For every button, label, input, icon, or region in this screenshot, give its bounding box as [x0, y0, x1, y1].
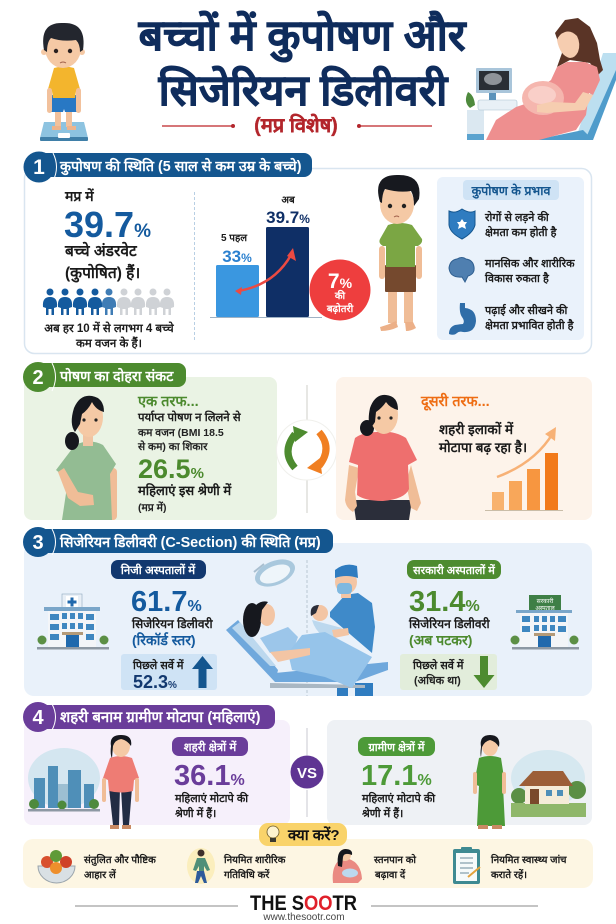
effect: immunity: [449, 209, 558, 239]
label: private hospitals: [111, 560, 206, 579]
arrow: rising trend: [235, 248, 296, 295]
illustration: rural woman: [473, 735, 506, 829]
label: government hospitals: [407, 560, 501, 579]
statistic: 39.7 percent underweight: मप्र में: [64, 188, 95, 204]
statistic: 17.1 percent: श्रेणी में हैं।: [361, 806, 403, 820]
section 3 heading: 3: [32, 532, 44, 554]
panel: section 4 left, urban: [24, 720, 290, 829]
badge: 7 percent increase: बढ़ोतरी: [326, 302, 354, 315]
statistic: 17.1 percent: 17.1%: [361, 760, 432, 792]
label: urban areas: [172, 737, 248, 756]
statistic: 39.7 percent underweight: 39.7%: [64, 204, 151, 245]
effect: immunity: क्षेमता कम होती है: [485, 225, 558, 239]
statistic: 17.1 percent: महिलाएं मोटापे की: [361, 791, 436, 805]
illustration: surgical lamp: [251, 554, 299, 592]
badge: VS: VS: [297, 765, 317, 782]
text: first side: महिलाएं इस श्रेणी में: [137, 483, 232, 498]
logo: The Sootr: THE SOOTR: [250, 892, 357, 915]
statistic: 31.4 percent: सिजेरियन डिलीवरी: [408, 617, 490, 631]
section 4 heading: [23, 702, 275, 732]
effect: learning: क्षेमता प्रभावित होती है: [485, 318, 575, 332]
section 3 heading: सिजेरियन डिलीवरी (C-Section) की स्थिति (मप्र): [59, 533, 321, 551]
bar chart: rising obesity: [485, 427, 563, 510]
pictogram: 4 of 10 children: [43, 288, 174, 315]
heading: what should be done: क्या करें?: [287, 826, 340, 844]
section 4 heading: शहरी बनाम ग्रामीण मोटापा (महिलाएं): [60, 708, 261, 726]
illustration: urban woman: [102, 735, 139, 829]
callout: previous survey higher: पिछले सर्वे में: [412, 658, 465, 672]
statistic: 39.7 percent underweight: (कुपोषित) हैं।: [65, 263, 140, 283]
panel: section 2 left, undernutrition: [24, 377, 277, 520]
statistic: 31.4 percent: 31.4%: [409, 586, 480, 618]
item: physical activity: [187, 848, 287, 884]
section 2 heading: 2: [32, 367, 44, 389]
statistic: 31.4 percent: [408, 586, 490, 648]
pictogram caption: अब हर 10 में से लगभग 4 बच्चे: [44, 321, 174, 335]
statistic: 36.1 percent: श्रेणी में हैं।: [174, 806, 216, 820]
statistic: 36.1 percent: 36.1%: [174, 760, 245, 792]
text: second side: शहरी इलाकों में: [439, 421, 514, 437]
item: breastfeeding: [333, 849, 416, 883]
text: first side: [137, 394, 242, 514]
section 1 heading: 1: [33, 156, 45, 179]
text: first side: पर्याप्त पोषण न लिलने से: [137, 410, 242, 424]
section 1 heading: [24, 152, 312, 182]
pictogram caption: [44, 321, 174, 350]
section 4 heading: 4: [32, 707, 44, 729]
item: physical activity: गतिविधि करें: [223, 868, 270, 881]
badge: 7 percent increase: की: [334, 289, 346, 302]
section 2 heading: पोषण का दोहरा संकट: [59, 367, 174, 385]
logo: The Sootr: www.thesootr.com: [262, 912, 345, 923]
text: first side: से कम) का शिकार: [137, 440, 208, 453]
effect: development: मानसिक और शारीरिक: [484, 256, 575, 270]
item: balanced diet: आहार लें: [84, 868, 117, 881]
effect: immunity: रोगों से लड़ने की: [484, 210, 550, 224]
illustration: thin boy: [378, 175, 422, 331]
section 2 heading: [23, 362, 186, 392]
label: rural areas: ग्रामीण क्षेत्रों में: [368, 740, 425, 754]
illustration: pregnant woman with ultrasound: [466, 18, 616, 140]
statistic: 39.7 percent underweight: [64, 188, 151, 283]
effect: learning: [449, 303, 575, 335]
panel: section 4 right, rural: [327, 720, 592, 829]
bar chart: 33 to 39.7 percent: 39.7%: [266, 208, 310, 227]
text: second side: मोटापा बढ़ रहा है।: [438, 439, 527, 455]
text: first side: एक तरफ...: [137, 394, 199, 410]
statistic: 36.1 percent: [174, 760, 249, 820]
subtitle: (मप्र विशेष): [254, 113, 338, 137]
logo: The Sootr: [75, 892, 538, 923]
callout: previous survey higher: [400, 654, 497, 690]
panel: section 1: [24, 152, 592, 354]
callout: previous survey 52.3 percent: 52.3%: [133, 672, 177, 692]
illustration: village house: [511, 750, 586, 817]
effects heading: कुपोषण के प्रभाव: [471, 183, 551, 199]
illustration: boy on weighing scale: [40, 23, 88, 141]
item: physical activity: नियमित शारीरिक: [223, 853, 287, 866]
item: health checkups: कराते रहें।: [490, 868, 527, 881]
badge: 7 percent increase: [310, 260, 370, 320]
section 3 heading: [23, 527, 333, 557]
badge: 7 percent increase: 7%: [328, 270, 353, 293]
statistic: 31.4 percent: (अब पटकर): [409, 632, 472, 648]
text: first side: कम वजन (BMI 18.5: [137, 427, 224, 439]
statistic: 61.7 percent: [131, 586, 213, 648]
effect: learning: पढ़ाई और सीखने की: [484, 303, 568, 317]
icon: cycle arrows: [276, 420, 336, 480]
statistic: 36.1 percent: महिलाएं मोटापे की: [174, 791, 249, 805]
bar chart: 33 to 39.7 percent: [210, 195, 322, 318]
callout: previous survey higher: (अधिक था): [414, 673, 461, 687]
item: health checkups: [453, 847, 567, 884]
illustration: government hospital: अस्पताल: [535, 606, 556, 612]
bar chart: 33 to 39.7 percent: अब: [281, 195, 296, 206]
effect: development: [449, 256, 575, 285]
illustration: government hospital: सरकारी: [537, 597, 554, 605]
text: first side: 26.5%: [138, 454, 204, 484]
text: first side: (मप्र में): [138, 501, 166, 514]
statistic: 61.7 percent: सिजेरियन डिलीवरी: [131, 617, 213, 631]
effects heading: [463, 180, 559, 200]
item: balanced diet: संतुलित और पौष्टिक: [83, 853, 157, 866]
label: government hospitals: सरकारी अस्पतालों में: [412, 563, 496, 577]
subtitle: [162, 113, 432, 137]
item: health checkups: नियमित स्वास्थ्य जांच: [490, 853, 567, 866]
pictogram caption: कम वजन के हैं।: [75, 336, 142, 350]
badge: VS: [290, 756, 324, 788]
section 1 heading: कुपोषण की स्थिति (5 साल से कम उम्र के बच्चे): [59, 157, 302, 176]
label: urban areas: शहरी क्षेत्रों में: [184, 740, 237, 754]
illustration: overweight woman: [345, 395, 421, 520]
label: rural areas: [358, 737, 435, 756]
illustration: government hospital: [510, 595, 579, 650]
title: [138, 10, 467, 115]
statistic: 61.7 percent: (रिकॉर्ड स्तर): [132, 632, 196, 648]
panel: effects of malnutrition: [437, 177, 584, 340]
panel: section 2 right, obesity: [336, 377, 592, 520]
statistic: 17.1 percent: [361, 760, 436, 820]
illustration: city skyline: [28, 748, 100, 812]
illustration: private hospital: [37, 594, 109, 650]
illustration: C-section delivery scene: [226, 565, 388, 696]
panel: section 3: [23, 527, 592, 696]
item: breastfeeding: स्तनपान को: [373, 853, 416, 866]
callout: previous survey 52.3 percent: [121, 654, 217, 692]
illustration: thin woman in green sari: [56, 396, 117, 520]
panel: what to do: [23, 839, 593, 888]
title: बच्चों में कुपोषण और: [138, 10, 467, 63]
label: private hospitals: निजी अस्पतालों में: [120, 563, 196, 577]
text: second side: दूसरी तरफ...: [420, 392, 490, 411]
heading: what should be done: [259, 823, 347, 846]
callout: previous survey 52.3 percent: पिछले सर्वे में: [132, 658, 185, 672]
item: balanced diet: [38, 850, 157, 883]
statistic: 61.7 percent: 61.7%: [131, 586, 202, 618]
statistic: 39.7 percent underweight: बच्चे अंडरवेट: [64, 241, 138, 260]
bar chart: 33 to 39.7 percent: 5 पहल: [221, 233, 248, 244]
text: second side: [420, 392, 527, 455]
effect: development: विकास रुकता है: [484, 271, 550, 285]
bar chart: 33 to 39.7 percent: 33%: [222, 247, 252, 266]
title: सिजेरियन डिलीवरी: [158, 65, 449, 115]
item: breastfeeding: बढ़ावा दें: [374, 868, 406, 881]
